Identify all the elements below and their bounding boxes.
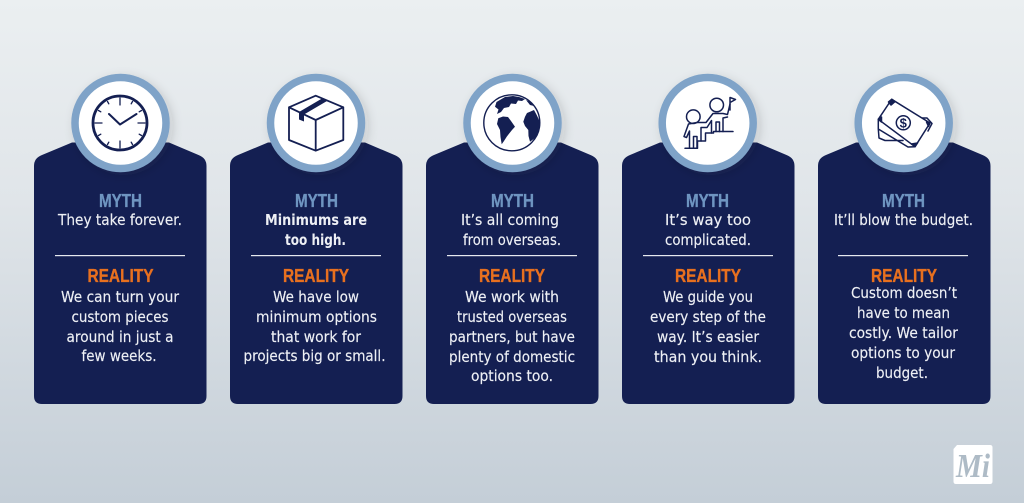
myth text [665, 211, 751, 249]
reality text: that work for [271, 328, 362, 346]
reality heading: REALITY [871, 265, 938, 286]
reality text: budget. [876, 364, 928, 382]
reality text: We guide you [663, 288, 753, 306]
icon: money [858, 78, 949, 168]
reality text: every step of the [650, 308, 766, 326]
reality text: We have low [273, 288, 359, 306]
panel: way too complicated [622, 78, 794, 404]
myth heading: MYTH [882, 190, 925, 211]
reality text: than you think. [654, 348, 762, 366]
myth text: from overseas. [463, 231, 561, 249]
logo: Mi [955, 448, 990, 485]
dollar sign: $ [900, 116, 908, 130]
reality text [449, 288, 575, 385]
reality text: way. It’s easier [657, 328, 760, 346]
reality text: projects big or small. [244, 347, 386, 365]
reality text [61, 288, 180, 365]
reality text [244, 288, 386, 365]
icon: clock [75, 78, 166, 168]
reality heading: REALITY [479, 265, 546, 286]
myth text [461, 211, 561, 249]
reality text [849, 284, 959, 382]
myth text: It’s way too [665, 211, 751, 229]
myth text: It’ll blow the budget. [834, 211, 973, 229]
reality text: trusted overseas [457, 308, 567, 326]
panel: they take forever [34, 78, 206, 404]
panel: all coming from overseas [426, 78, 598, 404]
reality text: few weeks. [82, 347, 156, 365]
reality text: costly. We tailor [849, 324, 959, 342]
reality text: custom pieces [72, 308, 169, 326]
icon: people climbing stairs [662, 78, 753, 168]
myth text: complicated. [665, 231, 751, 249]
myth text: Minimums are [265, 211, 367, 229]
myth heading: MYTH [491, 190, 534, 211]
myth heading: MYTH [99, 190, 142, 211]
reality text: options to your [851, 344, 956, 362]
panel: blow the budget [818, 78, 990, 404]
reality text: We can turn your [61, 288, 180, 306]
myth text: It’s all coming [461, 211, 559, 229]
myth heading: MYTH [686, 190, 729, 211]
reality text: minimum options [256, 308, 377, 326]
reality text: Custom doesn’t [851, 284, 957, 302]
icon: box [270, 78, 362, 168]
icon: globe [467, 78, 558, 168]
myth text: too high. [285, 231, 346, 249]
reality text [650, 288, 766, 366]
reality heading: REALITY [88, 265, 154, 286]
reality text: We work with [465, 288, 559, 306]
reality text: partners, but have [449, 328, 575, 346]
reality text: have to mean [857, 304, 950, 322]
panel: minimums are too high [230, 78, 402, 404]
myth text: They take forever. [57, 211, 182, 229]
reality text: options too. [471, 367, 553, 385]
myth text [265, 211, 367, 249]
myth heading: MYTH [295, 190, 338, 211]
reality text: plenty of domestic [449, 348, 575, 366]
reality text: around in just a [66, 328, 174, 346]
reality heading: REALITY [675, 265, 742, 286]
reality heading: REALITY [283, 265, 350, 286]
